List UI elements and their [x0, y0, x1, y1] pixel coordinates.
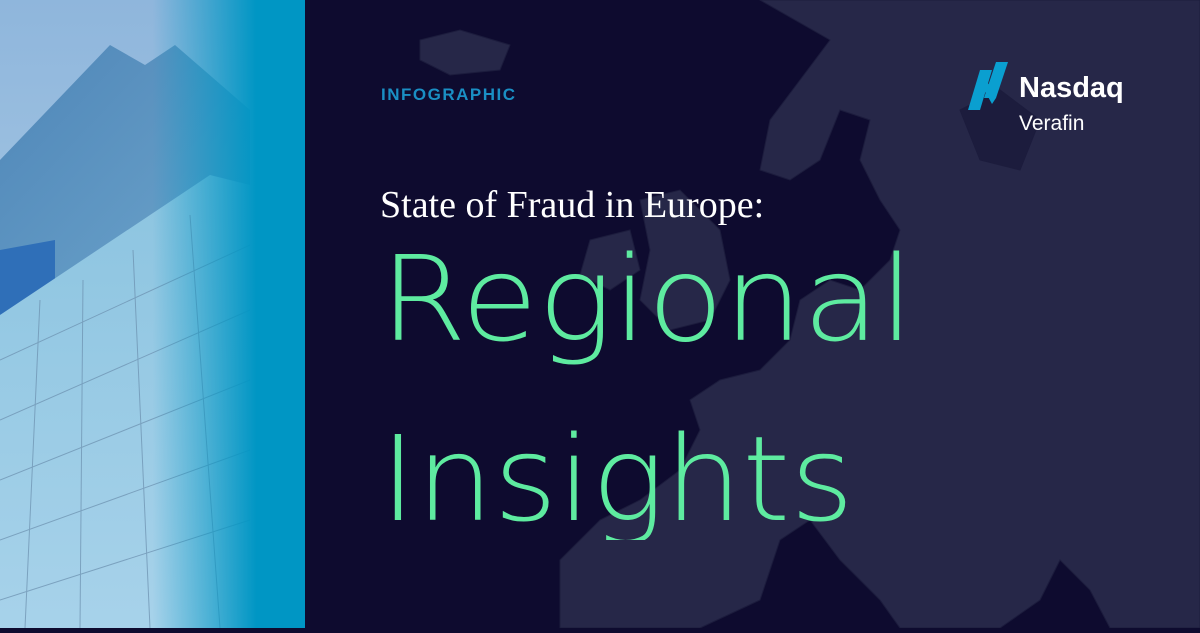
logo: Nasdaq Verafin: Verafin — [1019, 112, 1084, 135]
headline: Regional Insights — [380, 230, 914, 540]
logo: Nasdaq Verafin: Nasdaq — [1019, 72, 1124, 104]
left photo panel: glass building — [0, 0, 305, 628]
headline: Regional Insights: Regional — [380, 230, 914, 368]
logo: Nasdaq Verafin — [968, 62, 1124, 135]
title: State of Fraud in Europe: — [380, 184, 764, 226]
icon: nasdaq mark — [968, 62, 1008, 110]
background map of europe — [420, 0, 1200, 628]
eyebrow label: INFOGRAPHIC — [381, 85, 516, 104]
